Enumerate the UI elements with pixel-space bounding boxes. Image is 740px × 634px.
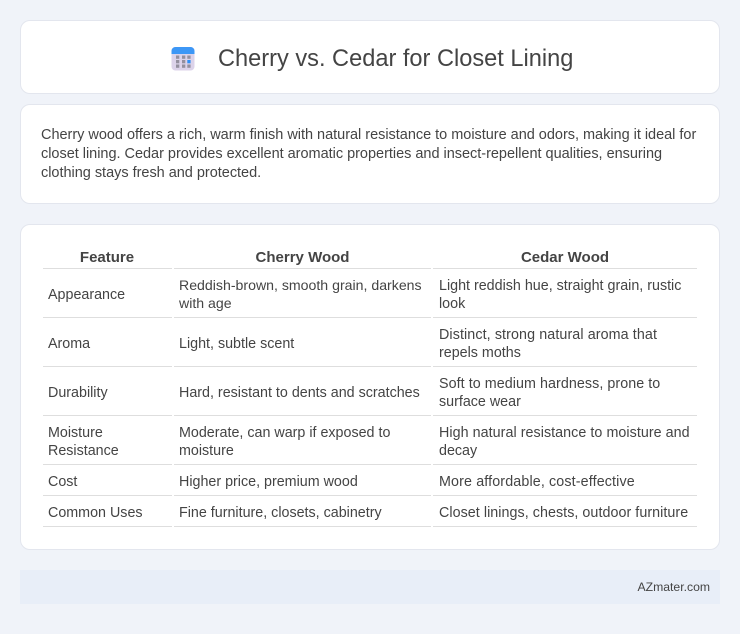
cherry appearance: with age bbox=[179, 295, 232, 311]
cedar appearance bbox=[439, 278, 681, 312]
cherry moisture bbox=[179, 425, 390, 459]
row: Cost: Cost bbox=[48, 474, 77, 490]
header: Cherry Wood: Cherry Wood bbox=[256, 249, 349, 266]
row: Moisture Resistance bbox=[48, 425, 119, 459]
footer bar bbox=[20, 570, 720, 604]
row: Common Uses: Common Uses bbox=[48, 505, 143, 521]
cherry moisture: moisture bbox=[179, 443, 234, 459]
cedar moisture: decay bbox=[439, 443, 477, 459]
cherry cost: Higher price, premium wood bbox=[179, 474, 358, 490]
cedar moisture bbox=[439, 425, 690, 459]
intro paragraph: closet lining. Cedar provides excellent aromatic properties and insect-repellent qualities, ensuring bbox=[41, 146, 662, 162]
cedar aroma bbox=[439, 327, 657, 361]
title: Cherry vs. Cedar for Closet Lining bbox=[218, 46, 573, 72]
row: Moisture Resistance: Resistance bbox=[48, 443, 119, 459]
cedar appearance: look bbox=[439, 296, 465, 312]
cedar durability bbox=[439, 376, 660, 410]
row: Aroma: Aroma bbox=[48, 336, 90, 352]
cedar uses: Closet linings, chests, outdoor furniture bbox=[439, 505, 688, 521]
cedar durability: surface wear bbox=[439, 394, 521, 410]
panel: comparison table card bbox=[20, 224, 720, 550]
cedar durability: Soft to medium hardness, prone to bbox=[439, 376, 660, 392]
row: Durability: Durability bbox=[48, 385, 108, 401]
cedar cost: More affordable, cost-effective bbox=[439, 474, 635, 490]
panel: intro text card bbox=[20, 104, 720, 204]
panel: title card bbox=[20, 20, 720, 94]
intro paragraph bbox=[41, 127, 696, 181]
cherry uses: Fine furniture, closets, cabinetry bbox=[179, 505, 382, 521]
row: Appearance: Appearance bbox=[48, 287, 125, 303]
cedar aroma: Distinct, strong natural aroma that bbox=[439, 327, 657, 343]
intro paragraph: Cherry wood offers a rich, warm finish with natural resistance to moisture and odors, making it ideal for bbox=[41, 127, 696, 143]
cherry appearance bbox=[179, 277, 422, 311]
cherry durability: Hard, resistant to dents and scratches bbox=[179, 385, 420, 401]
row: Moisture Resistance: Moisture bbox=[48, 425, 103, 441]
cedar moisture: High natural resistance to moisture and bbox=[439, 425, 690, 441]
cherry moisture: Moderate, can warp if exposed to bbox=[179, 425, 390, 441]
cherry appearance: Reddish-brown, smooth grain, darkens bbox=[179, 277, 422, 293]
header: Cedar Wood: Cedar Wood bbox=[521, 249, 609, 266]
cedar appearance: Light reddish hue, straight grain, rustic bbox=[439, 278, 681, 294]
cherry aroma: Light, subtle scent bbox=[179, 336, 294, 352]
footer brand: AZmater.com bbox=[638, 580, 710, 594]
intro paragraph: clothing stays fresh and protected. bbox=[41, 165, 261, 181]
cedar aroma: repels moths bbox=[439, 345, 521, 361]
icon: calendar bbox=[172, 47, 194, 70]
header: Feature: Feature bbox=[80, 249, 134, 266]
